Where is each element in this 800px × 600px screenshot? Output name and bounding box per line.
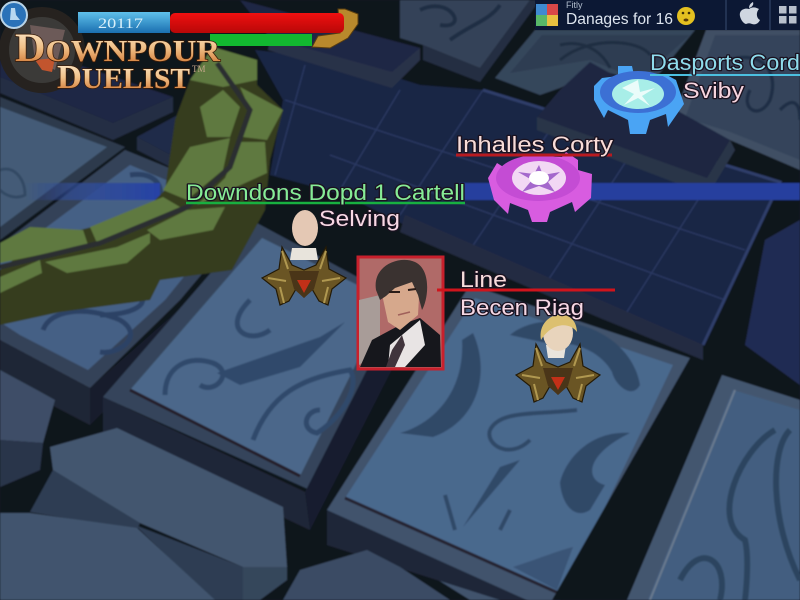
character: bald duelist (262, 210, 346, 305)
icon: grid (779, 6, 796, 24)
icon: apple (740, 2, 760, 24)
label: Selving: Selving (319, 206, 400, 231)
title logo (15, 25, 221, 96)
label: Dasports Cord: Dasports Cord (650, 50, 800, 75)
label: Downdons Dopd 1 Cartell: Downdons Dopd 1 Cartell (186, 180, 465, 205)
far left card B (0, 150, 260, 388)
label: Line: Line (460, 267, 507, 292)
raised dark platform (537, 62, 730, 178)
pink cog token (488, 152, 592, 222)
top right panel: Danages for 16 (566, 11, 673, 28)
character: blonde duelist (516, 315, 600, 402)
left dark blue tile (0, 60, 173, 123)
right blue tile (745, 220, 800, 385)
blue cog token (594, 66, 684, 134)
icon: app tile (536, 4, 558, 26)
label: Becen Riag: Becen Riag (460, 295, 584, 320)
blue band (25, 183, 160, 200)
main card 1 (103, 222, 400, 490)
top right panel (535, 0, 800, 30)
far left card A (0, 97, 125, 240)
top tile (240, 0, 420, 82)
icon: emoji (677, 7, 695, 25)
logo ring (4, 12, 80, 88)
green path (0, 47, 283, 325)
score: 20117 (98, 16, 144, 32)
title logo: TM (192, 64, 206, 74)
portrait card (358, 257, 443, 369)
title logo: DOWNPOUR (15, 25, 221, 70)
icon: gold ornament (312, 9, 358, 48)
label: Inhalles Corty: Inhalles Corty (456, 132, 613, 157)
label: Sviby: Sviby (683, 78, 744, 103)
blue grid board (255, 50, 780, 360)
main card 2 (327, 285, 690, 600)
icon: small emblem (1, 2, 27, 28)
top right panel: Fitly (566, 0, 583, 10)
bottom stones (0, 370, 55, 443)
connector line (437, 288, 615, 292)
top right cards (495, 30, 695, 95)
top centre card (400, 0, 530, 68)
main card 3 (627, 375, 800, 600)
title logo: DUELIST (57, 59, 190, 96)
health bars (78, 12, 344, 46)
